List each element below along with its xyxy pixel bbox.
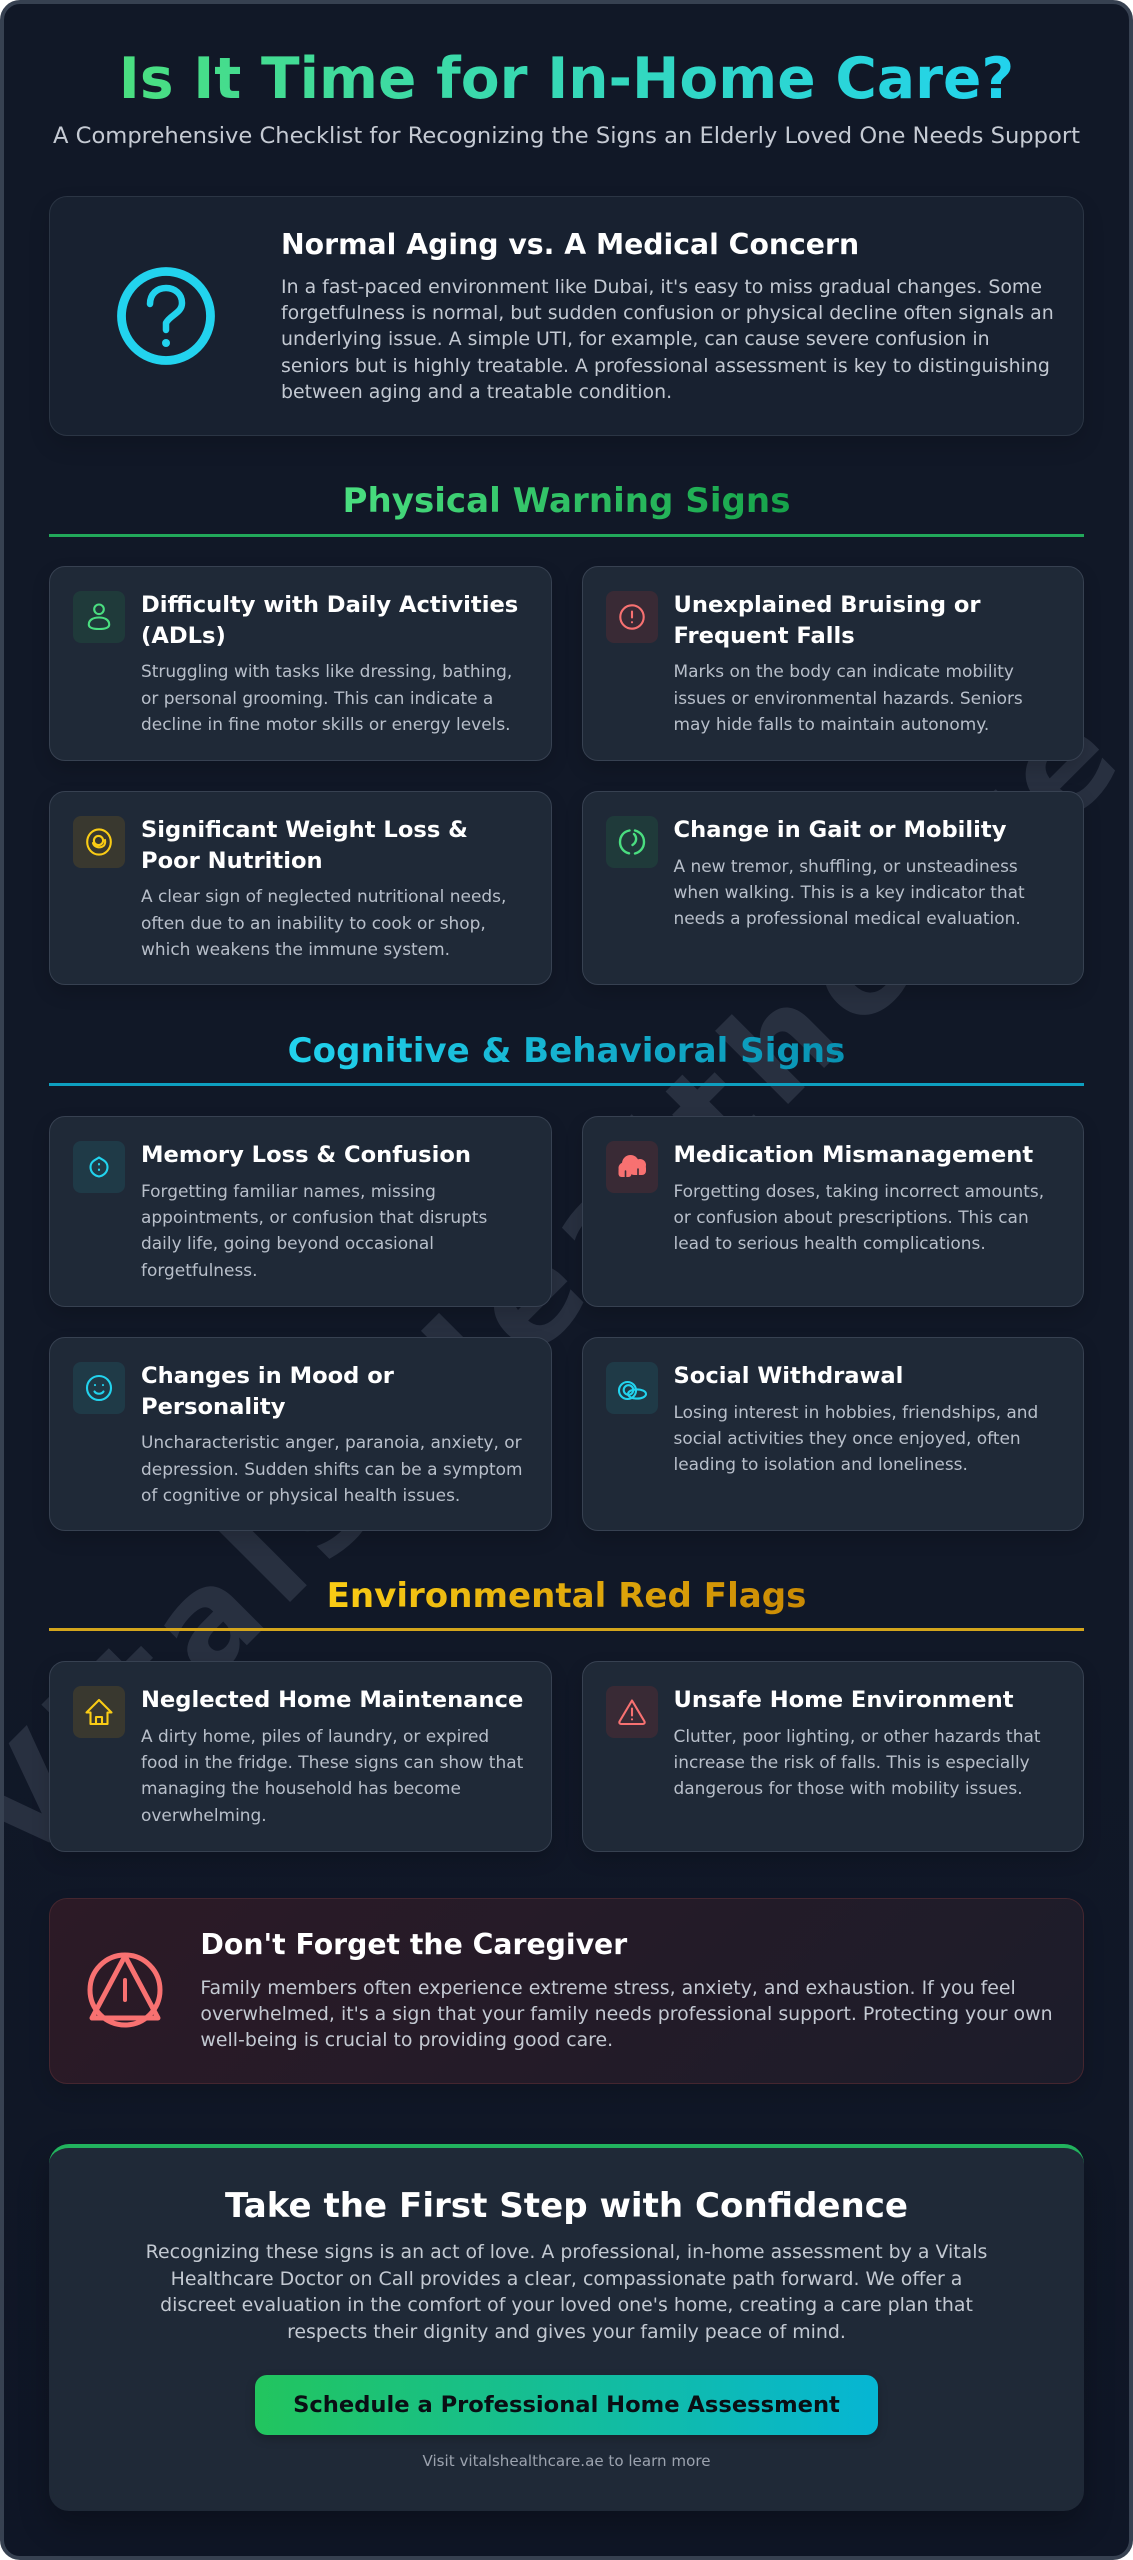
icon: brain circle bbox=[73, 1141, 125, 1193]
panel: call to action bbox=[49, 2144, 1084, 2511]
card heading: Poor Nutrition bbox=[141, 848, 323, 874]
icon: question mark bbox=[117, 267, 215, 365]
card heading bbox=[141, 817, 468, 874]
icon: rotating arcs bbox=[606, 816, 658, 868]
caregiver text: Family members often experience extreme stress, anxiety, and exhaustion. If you feel bbox=[200, 1976, 1016, 1998]
card heading bbox=[141, 1363, 394, 1420]
card text: increase the risk of falls. This is especially bbox=[674, 1752, 1030, 1772]
card text: which weakens the immune system. bbox=[141, 939, 450, 959]
CTA button: Schedule a Professional Home Assessment bbox=[293, 2392, 840, 2418]
section heading: environmental red flags bbox=[49, 1576, 1084, 1631]
card heading bbox=[141, 592, 518, 649]
card: neglected home maintenance bbox=[49, 1661, 552, 1852]
card text: needs a professional medical evaluation. bbox=[674, 908, 1021, 928]
card text: A dirty home, piles of laundry, or expired bbox=[141, 1726, 489, 1746]
card text: Forgetting doses, taking incorrect amounts, bbox=[674, 1180, 1044, 1200]
icon: warning triangle bbox=[606, 1686, 658, 1738]
caregiver text: well-being is crucial to providing good care. bbox=[200, 2029, 613, 2051]
CTA text bbox=[146, 2241, 987, 2343]
card text bbox=[141, 1726, 523, 1825]
card: memory loss bbox=[49, 1116, 552, 1307]
card heading: Significant Weight Loss & bbox=[141, 817, 468, 843]
card text: depression. Sudden shifts can be a symptom bbox=[141, 1459, 523, 1479]
card heading: Social Withdrawal bbox=[674, 1363, 903, 1389]
card: gait or mobility bbox=[582, 791, 1084, 985]
card heading: Neglected Home Maintenance bbox=[141, 1687, 523, 1713]
card heading: (ADLs) bbox=[141, 623, 226, 649]
card text: social activities they once enjoyed, often bbox=[674, 1428, 1021, 1448]
card text bbox=[674, 661, 1023, 734]
card heading: Unsafe Home Environment bbox=[674, 1687, 1014, 1713]
caregiver text: overwhelmed, it's a sign that your family needs professional support. Protecting your own bbox=[200, 2003, 1053, 2025]
intro text: underlying issue. A simple UTI, for example, can cause severe confusion in bbox=[281, 328, 990, 350]
card: mood or personality bbox=[49, 1337, 552, 1531]
card text bbox=[141, 1432, 523, 1505]
card text: or confusion about prescriptions. This can bbox=[674, 1207, 1029, 1227]
card text: decline in fine motor skills or energy levels. bbox=[141, 714, 511, 734]
section heading: physical warning signs bbox=[49, 481, 1084, 537]
card text: forgetfulness. bbox=[141, 1260, 258, 1280]
card text bbox=[674, 856, 1025, 928]
card text bbox=[674, 1180, 1044, 1253]
subtitle: A Comprehensive Checklist for Recognizing the Signs an Elderly Loved One Needs Support bbox=[53, 123, 1080, 149]
section heading: cognitive and behavioral signs: Cognitive & Behavioral Signs bbox=[288, 1030, 845, 1070]
panel: normal aging vs medical concern bbox=[49, 196, 1084, 436]
card heading bbox=[674, 592, 981, 649]
intro text: seniors but is highly treatable. A professional assessment is key to distinguishing bbox=[281, 355, 1050, 377]
card: medication mismanagement bbox=[582, 1116, 1084, 1307]
icon: person bbox=[73, 591, 125, 643]
card text: often due to an inability to cook or shop, bbox=[141, 913, 486, 933]
card heading: Medication Mismanagement bbox=[674, 1142, 1033, 1168]
card heading: Memory Loss & Confusion bbox=[141, 1142, 471, 1168]
card text: Uncharacteristic anger, paranoia, anxiety, or bbox=[141, 1432, 522, 1452]
card text: or personal grooming. This can indicate a bbox=[141, 688, 493, 708]
icon: alert circle bbox=[606, 591, 658, 643]
intro text: In a fast-paced environment like Dubai, it's easy to miss gradual changes. Some bbox=[281, 276, 1042, 298]
section heading: physical warning signs: Physical Warning Signs bbox=[343, 481, 790, 521]
intro heading: Normal Aging vs. A Medical Concern bbox=[281, 228, 859, 260]
card heading: Changes in Mood or bbox=[141, 1363, 394, 1389]
section heading: cognitive and behavioral signs bbox=[49, 1030, 1084, 1086]
card: social withdrawal bbox=[582, 1337, 1084, 1531]
card text: food in the fridge. These signs can show that bbox=[141, 1752, 523, 1772]
card text: Losing interest in hobbies, friendships, and bbox=[674, 1402, 1038, 1422]
caregiver text bbox=[200, 1976, 1053, 2051]
card text: managing the household has become bbox=[141, 1778, 461, 1798]
card: unexplained bruising bbox=[582, 566, 1084, 761]
card text: issues or environmental hazards. Seniors bbox=[674, 688, 1023, 708]
card text: lead to serious health complications. bbox=[674, 1233, 986, 1253]
card heading: Change in Gait or Mobility bbox=[674, 817, 1006, 843]
intro text bbox=[281, 276, 1054, 403]
card text: Forgetting familiar names, missing bbox=[141, 1180, 436, 1200]
icon: caregiver alert bbox=[88, 1952, 162, 2028]
title: Is It Time for In-Home Care? bbox=[119, 46, 1014, 112]
CTA text: Healthcare Doctor on Call provides a clear, compassionate path forward. We offer a bbox=[171, 2268, 962, 2290]
card text bbox=[141, 1180, 487, 1280]
card text: daily life, going beyond occasional bbox=[141, 1233, 434, 1253]
section heading: environmental red flags: Environmental Red Flags bbox=[327, 1576, 806, 1616]
card: weight loss bbox=[49, 791, 552, 985]
intro text: forgetfulness is normal, but sudden confusion or physical decline often signals an bbox=[281, 302, 1054, 324]
icon: target bbox=[73, 816, 125, 868]
icon: medication blob bbox=[606, 1141, 658, 1193]
card text bbox=[674, 1402, 1038, 1474]
icon: house bbox=[73, 1686, 125, 1738]
card text: Clutter, poor lighting, or other hazards that bbox=[674, 1726, 1040, 1746]
card text bbox=[141, 886, 506, 959]
CTA heading: Take the First Step with Confidence bbox=[225, 2186, 908, 2226]
card heading: Personality bbox=[141, 1394, 285, 1420]
caregiver heading: Don't Forget the Caregiver bbox=[200, 1928, 627, 1961]
CTA text: respects their dignity and gives your family peace of mind. bbox=[287, 2321, 846, 2343]
CTA button bbox=[255, 2375, 878, 2435]
CTA text: discreet evaluation in the comfort of your loved one's home, creating a care plan that bbox=[160, 2294, 973, 2316]
card text: dangerous for those with mobility issues. bbox=[674, 1778, 1023, 1798]
card: difficulty with daily activities bbox=[49, 566, 552, 761]
intro text: between aging and a treatable condition. bbox=[281, 381, 672, 403]
panel: caregiver callout bbox=[49, 1898, 1084, 2084]
card text: of cognitive or physical health issues. bbox=[141, 1485, 460, 1505]
card text: Struggling with tasks like dressing, bathing, bbox=[141, 661, 512, 681]
card text: A clear sign of neglected nutritional needs, bbox=[141, 886, 506, 906]
CTA text: Recognizing these signs is an act of love. A professional, in-home assessment by a Vitals bbox=[146, 2241, 987, 2263]
card text: may hide falls to maintain autonomy. bbox=[674, 714, 989, 734]
card text: leading to isolation and loneliness. bbox=[674, 1454, 968, 1474]
card text: overwhelming. bbox=[141, 1805, 267, 1825]
card heading: Unexplained Bruising or bbox=[674, 592, 981, 618]
card heading: Frequent Falls bbox=[674, 623, 855, 649]
icon: overlapping rings bbox=[606, 1362, 658, 1414]
card heading: Difficulty with Daily Activities bbox=[141, 592, 518, 618]
website note: Visit vitalshealthcare.ae to learn more bbox=[422, 2452, 710, 2470]
card text bbox=[141, 661, 512, 734]
card text: appointments, or confusion that disrupts bbox=[141, 1207, 487, 1227]
card text: Marks on the body can indicate mobility bbox=[674, 661, 1014, 681]
card text: when walking. This is a key indicator that bbox=[674, 882, 1025, 902]
card text bbox=[674, 1726, 1040, 1798]
icon: smile bbox=[73, 1362, 125, 1414]
card: unsafe home environment bbox=[582, 1661, 1084, 1852]
card text: A new tremor, shuffling, or unsteadiness bbox=[674, 856, 1018, 876]
